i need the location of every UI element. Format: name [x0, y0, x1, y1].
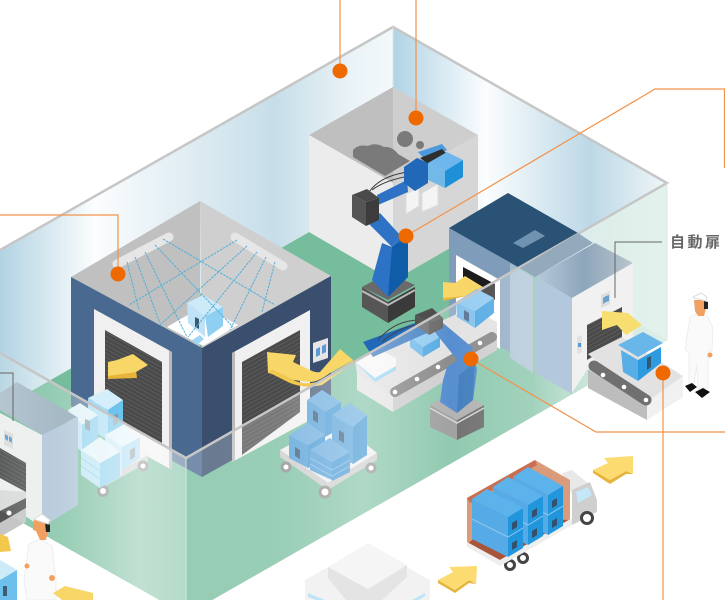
- cargo bed: [467, 460, 572, 566]
- door sensor panel: [601, 291, 610, 308]
- worker: left: [24, 514, 56, 600]
- rollers: [393, 341, 482, 394]
- gray back enclosure: [309, 87, 478, 281]
- scanned box: [187, 295, 223, 345]
- left machine: [0, 382, 78, 537]
- entry box: [618, 332, 663, 381]
- scanner booth: [71, 201, 331, 477]
- arrow: out of machine: [443, 276, 483, 301]
- arrow: into right machine: [602, 311, 642, 335]
- stacked boxes: [289, 390, 367, 481]
- right shutter: [587, 307, 622, 360]
- left conveyor: [0, 490, 26, 537]
- storage building: [305, 543, 430, 600]
- conveyor belt: [395, 337, 492, 392]
- wall panels: [406, 184, 438, 214]
- arrow: into scanner: [267, 349, 353, 387]
- callout dots: [110, 64, 670, 380]
- side panel: [577, 335, 582, 354]
- arrow: truck departing: [593, 456, 633, 484]
- box under gripper: [410, 327, 440, 357]
- arrow: out of scanner: [108, 354, 148, 379]
- entry conveyor: [588, 337, 683, 420]
- left face: [71, 277, 202, 477]
- machine opening: [456, 255, 500, 349]
- gripper pad: [418, 144, 447, 164]
- delivery truck: [467, 460, 597, 570]
- belt: [594, 366, 646, 400]
- white plinth: [167, 306, 238, 346]
- box on belt: [456, 289, 494, 328]
- right trolley: [280, 390, 377, 497]
- worker: right: [685, 293, 713, 398]
- auto door label: 自動扉: [670, 233, 723, 251]
- lower-left box: [0, 560, 17, 600]
- central conveyor: [355, 289, 497, 412]
- robot joint: [352, 189, 379, 226]
- robot base: [362, 273, 415, 323]
- leader: auto door left: [0, 373, 13, 421]
- truck cab: [562, 470, 597, 525]
- rollers: [601, 373, 648, 402]
- arrow: lower-left bottom: [53, 586, 93, 600]
- robot joint: [415, 308, 443, 335]
- scanner bars: [117, 237, 283, 266]
- arrow: lower-left small: [0, 534, 11, 552]
- machine lid plate: [513, 230, 545, 248]
- right machine units: [520, 233, 633, 394]
- robot base: [430, 390, 484, 440]
- left door: [94, 309, 172, 470]
- upper robot arm: [352, 144, 463, 323]
- smoke cloud: [353, 131, 424, 176]
- left shutter: [0, 448, 26, 492]
- truck wheels: [506, 554, 528, 570]
- truck boxes: [472, 467, 563, 557]
- back walls of the room: [0, 27, 667, 409]
- door switch panel: [313, 338, 328, 363]
- wheels: [282, 463, 375, 497]
- left trolley: [68, 389, 148, 496]
- back machine: [449, 193, 578, 373]
- floor: [0, 184, 667, 600]
- scan beams: [127, 239, 275, 337]
- leader: auto door right: [615, 242, 662, 298]
- arrow: to truck: [438, 566, 477, 593]
- right face: [202, 276, 331, 477]
- gripper: [404, 158, 428, 191]
- tray on table: [355, 350, 396, 382]
- wheels: [98, 462, 147, 496]
- right door: [232, 310, 310, 462]
- left panel: [4, 430, 13, 449]
- lower robot arm: [363, 308, 484, 440]
- held box: [428, 152, 463, 188]
- stacked boxes: [68, 389, 140, 488]
